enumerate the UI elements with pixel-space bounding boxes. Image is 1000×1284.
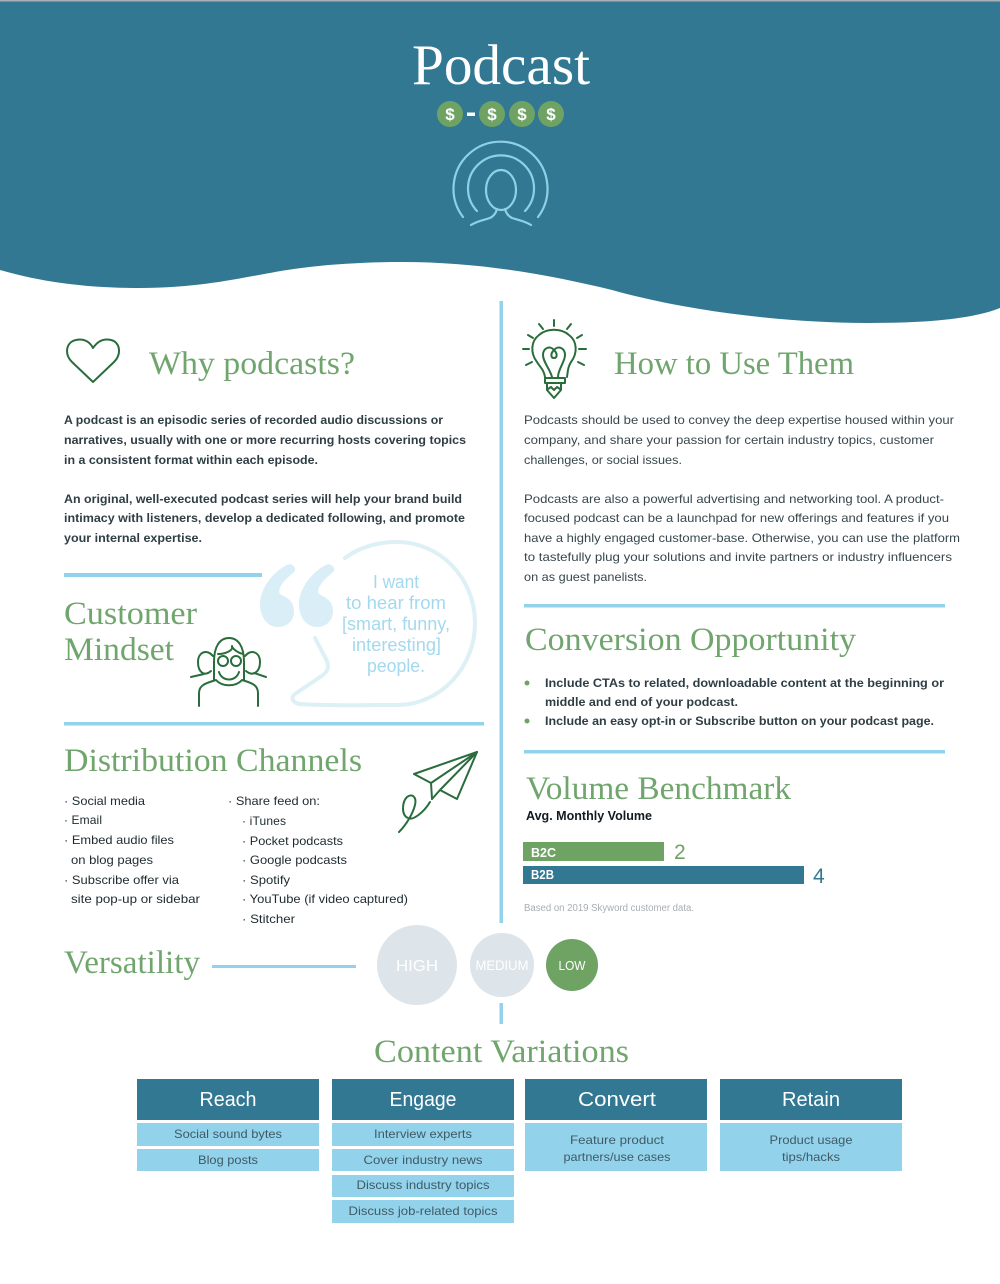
column: engage (332, 1079, 514, 1223)
list: distribution channels left: on blog pages (71, 853, 153, 867)
list: distribution channels right: · Pocket podcasts (242, 834, 343, 848)
bullet list: conversion opportunity: Include CTAs to related, downloadable content at the beginning or (545, 676, 944, 690)
quote text: people. (367, 656, 425, 676)
vertical divider top (500, 301, 503, 923)
rating: versatility circles: LOW (558, 958, 586, 973)
cost rating: dollar icons (437, 101, 564, 127)
text block: why podcasts: A podcast is an episodic series of recorded audio discussions or (64, 413, 443, 427)
list: distribution channels right: · Stitcher (242, 912, 295, 926)
cost rating: dollar icons: $ (517, 105, 527, 124)
text block: why podcasts: narratives, usually with one or more recurring hosts covering topics (64, 433, 466, 447)
bar chart: volume benchmark (523, 841, 825, 888)
list: distribution channels right: · iTunes (242, 814, 286, 828)
bar chart: volume benchmark: 2 (674, 841, 686, 864)
icon: podcast listener (453, 142, 548, 225)
cost rating: dollar icons: $ (445, 105, 455, 124)
text block: how to use them: challenges, or social issues. (524, 453, 682, 467)
list: distribution channels left: site pop-up or sidebar (71, 892, 200, 906)
list: distribution channels right (228, 794, 408, 926)
list: distribution channels left: · Embed audio files (64, 833, 174, 847)
heading: customer mindset: Customer (64, 596, 197, 632)
list: distribution channels left: · Social media (64, 794, 145, 808)
column: convert: Feature product (570, 1133, 665, 1147)
text block: how to use them: to tastefully plug your solutions and invite partners or industry influencers (524, 550, 952, 564)
column: engage: Engage (390, 1089, 456, 1111)
rating: versatility circles: HIGH (396, 958, 438, 975)
text block: why podcasts (64, 413, 466, 545)
text block: why podcasts: your internal expertise. (64, 531, 202, 545)
title: Podcast (412, 34, 590, 97)
text block: how to use them: company, and share your passion for certain industry topics, customer (524, 433, 934, 447)
bullet list: conversion opportunity (524, 676, 944, 728)
heading: why podcasts: Why podcasts? (149, 346, 355, 382)
header banner wave (0, 1, 1000, 323)
column: engage: Discuss job-related topics (348, 1204, 498, 1218)
quote text: interesting] (352, 635, 441, 655)
list: distribution channels right: · Spotify (242, 873, 290, 887)
column: convert: partners/use cases (564, 1150, 670, 1164)
column: convert (525, 1079, 707, 1171)
icon: person with listeners (191, 638, 266, 706)
heading: how to use them: How to Use Them (614, 346, 854, 382)
list: distribution channels right: · Share feed on: (228, 794, 320, 808)
quote text (342, 572, 450, 676)
heading: volume benchmark: Volume Benchmark (526, 771, 792, 807)
column: engage: Cover industry news (364, 1153, 482, 1167)
rating: versatility circles: MEDIUM (476, 957, 528, 973)
bar chart: volume benchmark: B2C (531, 846, 556, 860)
heading: customer mindset (64, 596, 197, 668)
bar chart: volume benchmark: 4 (813, 865, 825, 888)
bullet list: conversion opportunity: Include an easy opt-in or Subscribe button on your podcast page. (545, 714, 934, 728)
speech bubble (293, 542, 475, 705)
heading: versatility: Versatility (64, 945, 200, 981)
quote marks (260, 564, 334, 627)
quote text: [smart, funny, (342, 614, 450, 634)
column: retain: Retain (782, 1089, 840, 1111)
bar chart: volume benchmark: B2B (531, 868, 554, 882)
cost rating: dollar icons: $ (546, 105, 556, 124)
text block: why podcasts: intimacy with listeners, develop a dedicated following, and promote (64, 511, 465, 525)
text block: how to use them (524, 413, 960, 584)
icon: heart (67, 339, 119, 382)
source note: Based on 2019 Skyword customer data. (524, 903, 694, 914)
list: distribution channels left: · Subscribe offer via (64, 873, 179, 887)
text block: why podcasts: in a consistent format within each episode. (64, 453, 318, 467)
column: retain (720, 1079, 902, 1171)
text block: how to use them: focused podcast can be a launchpad for new offerings and features if you (524, 511, 949, 525)
icon: paper plane (399, 752, 477, 832)
column: engage: Interview experts (374, 1127, 472, 1141)
list: distribution channels left (64, 794, 200, 906)
heading: content variations: Content Variations (374, 1034, 629, 1070)
list: distribution channels right: · YouTube (if video captured) (242, 892, 408, 906)
column: reach: Blog posts (198, 1153, 258, 1167)
rating: versatility circles (377, 925, 598, 1005)
list: distribution channels right: · Google podcasts (242, 853, 347, 867)
text block: how to use them: Podcasts are also a powerful advertising and networking tool. A product- (524, 492, 944, 506)
column: reach: Social sound bytes (174, 1127, 282, 1141)
text block: how to use them: Podcasts should be used to convey the deep expertise housed within your (524, 413, 954, 427)
icon: light bulb (523, 320, 586, 398)
text block: why podcasts: An original, well-executed podcast series will help your brand build (64, 492, 462, 506)
bullet list: conversion opportunity: middle and end of your podcast. (545, 695, 738, 709)
chart subtitle: Avg. Monthly Volume (526, 809, 652, 823)
cost rating: dollar icons: $ (487, 105, 497, 124)
column: reach (137, 1079, 319, 1171)
heading: customer mindset: Mindset (64, 632, 174, 668)
quote text: to hear from (346, 593, 446, 613)
column: retain: Product usage (770, 1133, 853, 1147)
quote text: I want (373, 572, 419, 592)
text block: how to use them: on as guest panelists. (524, 570, 647, 584)
heading: distribution channels: Distribution Channels (64, 743, 362, 779)
column: reach: Reach (200, 1089, 256, 1111)
heading: conversion opportunity: Conversion Opportunity (525, 622, 857, 658)
list: distribution channels left: · Email (64, 813, 102, 827)
column: retain: tips/hacks (782, 1150, 840, 1164)
text block: how to use them: have a highly engaged customer-base. Otherwise, you can use the platform (524, 531, 960, 545)
column: convert: Convert (578, 1089, 656, 1111)
column: engage: Discuss industry topics (356, 1178, 490, 1192)
